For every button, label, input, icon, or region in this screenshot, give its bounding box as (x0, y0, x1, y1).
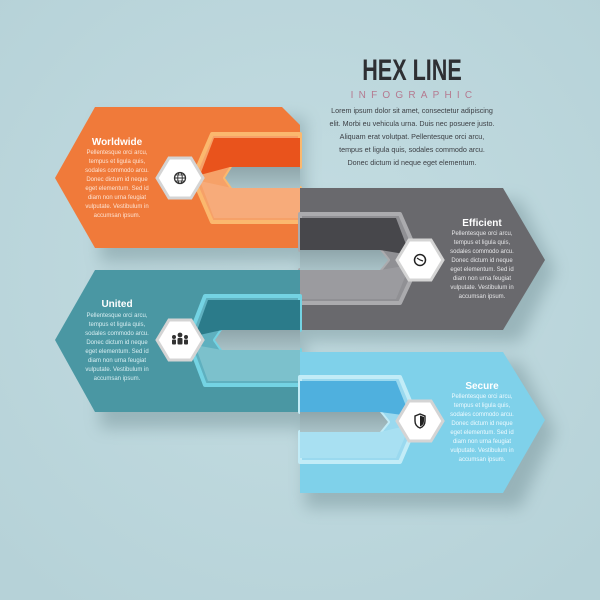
text: united body: sodales commodo arcu. (85, 331, 149, 337)
text: secure body: diam non urna feugiat (453, 439, 511, 445)
heading: Secure: Secure (465, 381, 499, 392)
text: worldwide body: eget elementum. Sed id (85, 186, 149, 192)
text: efficient body (450, 231, 514, 300)
text: efficient body: diam non urna feugiat (453, 276, 511, 282)
text: intro: Lorem ipsum dolor sit amet, consectetur adipiscing (331, 106, 493, 115)
title: HEX LINE (362, 52, 462, 87)
panel: united (55, 270, 300, 412)
text: worldwide body: accumsan ipsum. (94, 213, 141, 219)
text: worldwide body: vulputate. Vestibulum in (85, 204, 149, 210)
text: secure body: accumsan ipsum. (459, 457, 506, 463)
text: worldwide body: sodales commodo arcu. (85, 168, 149, 174)
text: united body: Pellentesque orci arcu, (86, 313, 148, 319)
icon: people hex (157, 320, 203, 360)
text: efficient body: vulputate. Vestibulum in (450, 285, 514, 291)
text: efficient body: sodales commodo arcu. (450, 249, 514, 255)
text: efficient body: accumsan ipsum. (459, 294, 506, 300)
tube: orange (193, 134, 300, 222)
text: worldwide body: Donec dictum id neque (86, 177, 148, 183)
text: secure body: vulputate. Vestibulum in (450, 448, 514, 454)
text: united body (85, 313, 149, 382)
panel: secure (300, 352, 545, 493)
icon: shield hex (397, 401, 443, 441)
subtitle: INFOGRAPHIC (351, 90, 477, 101)
text: worldwide body: diam non urna feugiat (88, 195, 146, 201)
text: intro: elit. Morbi eu vehicula urna. Duis nec posuere justo. (329, 119, 495, 128)
text: intro: Donec dictum id neque eget elementum. (347, 158, 477, 167)
text: intro (329, 106, 495, 167)
text: secure body: eget elementum. Sed id (450, 430, 514, 436)
text: intro: tempus et ligula quis, sodales commodo arcu. (339, 145, 485, 154)
text: united body: tempus et ligula quis, (89, 322, 146, 328)
text: efficient body: tempus et ligula quis, (454, 240, 511, 246)
text: worldwide body (85, 150, 149, 219)
panel: efficient (300, 188, 545, 330)
text: secure body: tempus et ligula quis, (454, 403, 511, 409)
text: united body: diam non urna feugiat (88, 358, 146, 364)
text: secure body: Donec dictum id neque (451, 421, 513, 427)
text: efficient body: Donec dictum id neque (451, 258, 513, 264)
icon: clock hex (397, 240, 443, 280)
text: efficient body: Pellentesque orci arcu, (451, 231, 513, 237)
text: worldwide body: tempus et ligula quis, (89, 159, 146, 165)
text: worldwide body: Pellentesque orci arcu, (86, 150, 148, 156)
tube: light blue (300, 377, 418, 462)
text: secure body: Pellentesque orci arcu, (451, 394, 513, 400)
text: united body: vulputate. Vestibulum in (85, 367, 149, 373)
heading: Worldwide: Worldwide (92, 137, 143, 148)
tube: gray (300, 214, 420, 303)
text: secure body: sodales commodo arcu. (450, 412, 514, 418)
icon: globe hex (157, 158, 203, 198)
text: efficient body: eget elementum. Sed id (450, 267, 514, 273)
text: united body: accumsan ipsum. (94, 376, 141, 382)
shadows (100, 118, 555, 508)
panel: worldwide (55, 107, 300, 248)
heading: United: United (101, 299, 133, 310)
text: united body: eget elementum. Sed id (85, 349, 149, 355)
tube: teal (188, 296, 300, 385)
heading: Efficient: Efficient (462, 218, 502, 229)
text: united body: Donec dictum id neque (86, 340, 148, 346)
text: intro: Aliquam erat volutpat. Pellentesque orci arcu, (340, 132, 484, 141)
text: secure body (450, 394, 514, 463)
